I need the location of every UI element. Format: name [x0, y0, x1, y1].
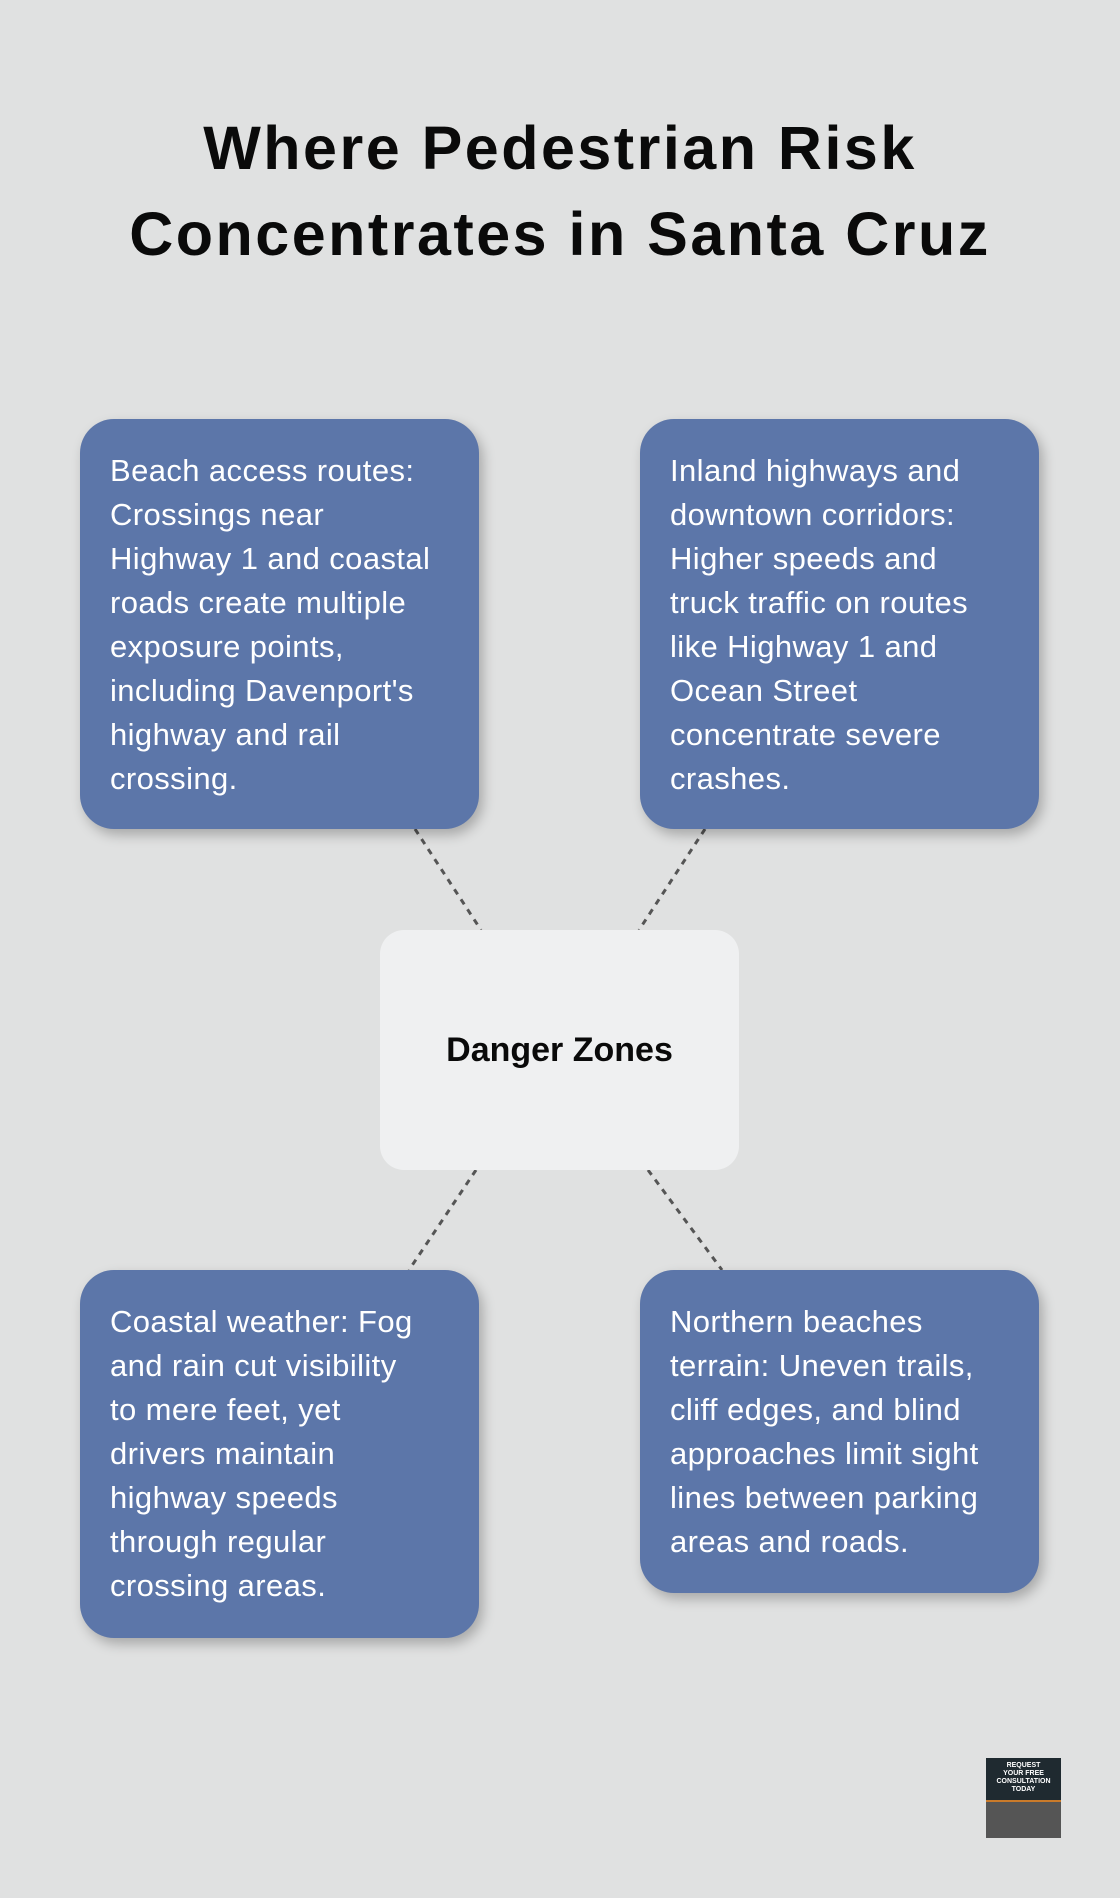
panel: inland highways: crashes.: [670, 761, 790, 796]
panel: beach access routes: crossing.: [110, 761, 238, 796]
panel: beach access routes: exposure points,: [110, 629, 344, 664]
center node: Danger Zones: [446, 1030, 673, 1068]
logo: TODAY: [1012, 1786, 1035, 1793]
panel: inland highways: truck traffic on routes: [670, 585, 968, 620]
panel: coastal weather: drivers maintain: [110, 1436, 335, 1471]
panel: northern beaches: approaches limit sight: [670, 1436, 979, 1471]
panel: northern beaches: Northern beaches: [670, 1304, 923, 1339]
panel: beach access routes: Crossings near: [110, 497, 324, 532]
panel: beach access routes: including Davenport's: [110, 673, 414, 708]
panel: northern beaches: lines between parking: [670, 1480, 978, 1515]
logo: [986, 1758, 1061, 1838]
panel: beach access routes: highway and rail: [110, 717, 340, 752]
panel: beach access routes: [80, 419, 479, 829]
title: [129, 114, 991, 268]
logo: REQUEST: [1007, 1762, 1040, 1769]
panel: inland highways: downtown corridors:: [670, 497, 955, 532]
panel: coastal weather: Coastal weather: Fog: [110, 1304, 413, 1339]
panel: coastal weather: to mere feet, yet: [110, 1392, 341, 1427]
panel: inland highways: [640, 419, 1039, 829]
panel: beach access routes: Highway 1 and coastal: [110, 541, 430, 576]
panel: beach access routes: roads create multiple: [110, 585, 406, 620]
panel: inland highways: like Highway 1 and: [670, 629, 937, 664]
center node: [380, 930, 739, 1170]
panel: coastal weather: and rain cut visibility: [110, 1348, 397, 1383]
panel: northern beaches: areas and roads.: [670, 1524, 909, 1559]
panel: inland highways: Higher speeds and: [670, 541, 937, 576]
panel: northern beaches: [640, 1270, 1039, 1593]
panel: northern beaches: cliff edges, and blind: [670, 1392, 961, 1427]
panel: inland highways: Ocean Street: [670, 673, 857, 708]
logo: YOUR FREE: [1003, 1770, 1044, 1777]
panel: coastal weather: crossing areas.: [110, 1568, 326, 1603]
panel: coastal weather: highway speeds: [110, 1480, 338, 1515]
panel: northern beaches: terrain: Uneven trails,: [670, 1348, 974, 1383]
title: Where Pedestrian Risk: [203, 114, 917, 182]
panel: beach access routes: Beach access routes:: [110, 453, 414, 488]
panel: coastal weather: [80, 1270, 479, 1638]
panel: inland highways: Inland highways and: [670, 453, 960, 488]
panel: coastal weather: through regular: [110, 1524, 326, 1559]
panel: inland highways: concentrate severe: [670, 717, 941, 752]
title: Concentrates in Santa Cruz: [129, 200, 991, 268]
logo: CONSULTATION: [996, 1778, 1051, 1785]
